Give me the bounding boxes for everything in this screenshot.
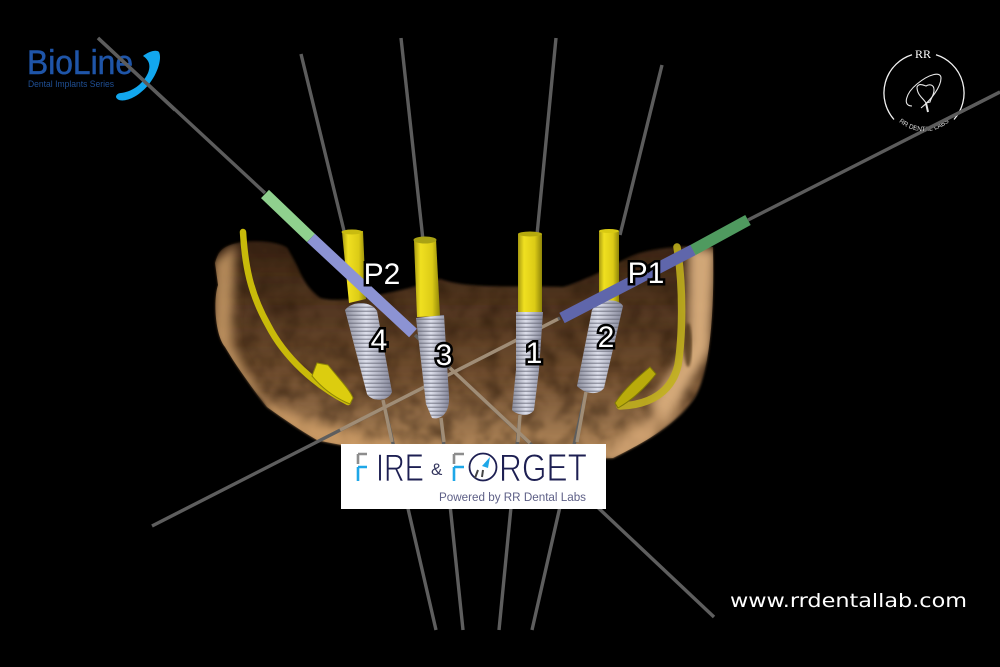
abutment 3 xyxy=(414,239,440,317)
guide lines: lower axes xyxy=(152,318,714,630)
BioLine logo xyxy=(27,44,160,100)
emblem tooth icon xyxy=(906,74,941,112)
Fire & Forget badge xyxy=(341,444,606,509)
line over logo xyxy=(98,38,175,110)
guide lines: tinted over bone xyxy=(340,319,586,443)
tilted rod P2 xyxy=(265,194,413,333)
badge wordmark: & xyxy=(431,460,443,479)
line over emblem xyxy=(925,92,1000,130)
guide lines: upper grey axes xyxy=(98,38,1000,240)
logo tagline: Dental Implants Series xyxy=(28,79,114,90)
emblem name: RR DENTAL LABS xyxy=(899,118,948,132)
implant 2 xyxy=(577,229,623,393)
emblem ring xyxy=(884,55,964,119)
left nerve canal xyxy=(243,232,353,404)
abutment 1 xyxy=(518,234,542,313)
jawbone scan xyxy=(210,235,720,470)
label P1: P1 xyxy=(628,257,664,290)
abutment 2 xyxy=(599,231,619,303)
logo wordmark: BioLine xyxy=(27,44,133,82)
website url: www.rrdentallab.com xyxy=(730,590,967,612)
screw body 3 xyxy=(416,315,449,418)
abutment 4 xyxy=(342,231,366,303)
implant 4 xyxy=(342,230,392,400)
right nerve canal xyxy=(615,247,682,408)
badge tagline: Powered by RR Dental Labs xyxy=(439,490,586,504)
implant 1 xyxy=(512,232,543,415)
label 4: 4 xyxy=(371,324,387,357)
implant labels xyxy=(364,257,664,372)
screw body 4 xyxy=(345,303,392,400)
RR Dental Labs emblem xyxy=(883,47,965,132)
emblem initials: RR xyxy=(915,47,931,61)
screw body 1 xyxy=(512,312,543,415)
label 2: 2 xyxy=(598,321,614,354)
badge wordmark xyxy=(358,447,587,490)
badge wordmark: IRE xyxy=(376,447,424,490)
badge wordmark: RGET xyxy=(499,447,587,490)
label 3: 3 xyxy=(436,339,452,372)
tilted rod P1 xyxy=(562,220,748,318)
screw body 2 xyxy=(577,300,623,393)
implant 3 xyxy=(414,236,449,418)
logo swoosh xyxy=(116,51,160,100)
label 1: 1 xyxy=(526,337,542,370)
label P2: P2 xyxy=(364,258,400,291)
